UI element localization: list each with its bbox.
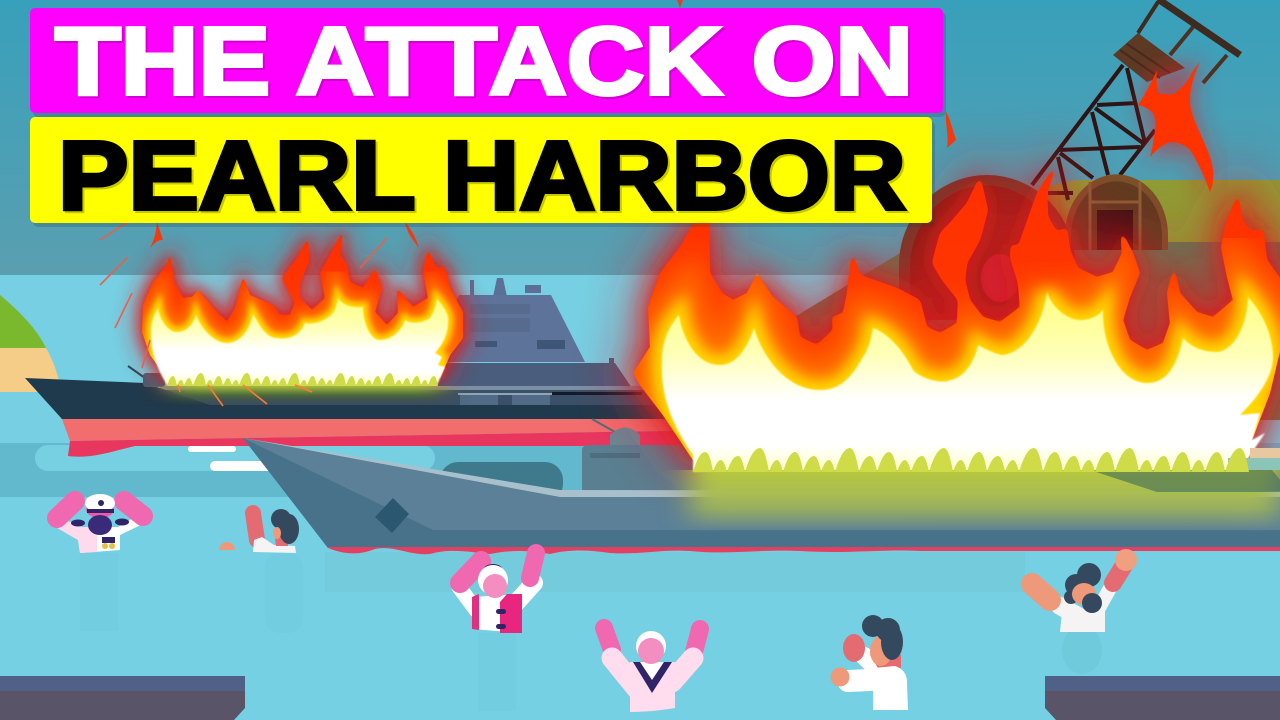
warship hull — [243, 438, 1280, 548]
person: sailor in life vest — [459, 553, 536, 711]
large fire base teeth — [693, 448, 1249, 472]
dock: left pier — [0, 676, 245, 720]
ember by title — [946, 112, 956, 148]
small fire tight red glow — [142, 230, 463, 378]
ship hull — [25, 378, 720, 419]
title block — [30, 8, 946, 232]
dock: right pier — [1045, 676, 1280, 720]
island: left shore — [0, 295, 62, 392]
title banner: magenta: THE ATTACK ON — [57, 10, 915, 117]
pale strip at right deck — [1228, 448, 1280, 470]
title banner: magenta: THE ATTACK ON — [55, 8, 913, 115]
large fire flames — [633, 158, 1280, 462]
ship: rear battleship — [25, 278, 720, 457]
title banner: yellow: PEARL HARBOR — [58, 121, 906, 230]
small fire wide glow — [142, 230, 463, 378]
glow on hull below small fire — [172, 386, 440, 406]
warship deck fittings — [440, 419, 1280, 502]
warship hatch — [375, 498, 409, 533]
person: swimmer with raised fist — [830, 615, 908, 710]
icon: large quonset hut — [899, 175, 1075, 320]
warship waterline — [328, 547, 1280, 554]
ship: front grey warship — [243, 419, 1280, 554]
large fire wide glow — [633, 158, 1280, 462]
icon: leaning watchtower — [1032, 0, 1240, 200]
island: right hill — [760, 180, 1280, 420]
small fire orange and yellow halo — [151, 298, 448, 385]
small fire base teeth — [167, 373, 438, 386]
icon: small quonset hut — [1065, 174, 1168, 250]
fire: small fire on rear ship — [100, 222, 463, 406]
glow on hull below large fire — [690, 470, 1280, 532]
small fire flames — [142, 230, 463, 378]
small fire sparks — [100, 222, 387, 406]
small flame on top edge — [677, 0, 683, 8]
large fire white core — [662, 292, 1273, 472]
detached flame glow — [1138, 62, 1213, 192]
fire: large fire on front ship — [633, 0, 1280, 532]
person: bearded swimmer waving — [1032, 549, 1137, 674]
person: swimmer with dark hair, back view — [219, 509, 303, 633]
small fire white core — [151, 298, 448, 385]
ship gun — [128, 366, 165, 387]
detached flame — [1138, 62, 1213, 192]
large fire tight red glow — [633, 158, 1280, 462]
person: sailor with navy collar — [604, 628, 700, 712]
large fire orange and yellow halo — [662, 292, 1273, 472]
person: captain — [49, 494, 151, 631]
deck housing below fire — [1090, 470, 1280, 492]
title banner: yellow: PEARL HARBOR — [60, 123, 908, 232]
flying embers — [150, 222, 419, 248]
ship superstructure — [160, 278, 720, 408]
